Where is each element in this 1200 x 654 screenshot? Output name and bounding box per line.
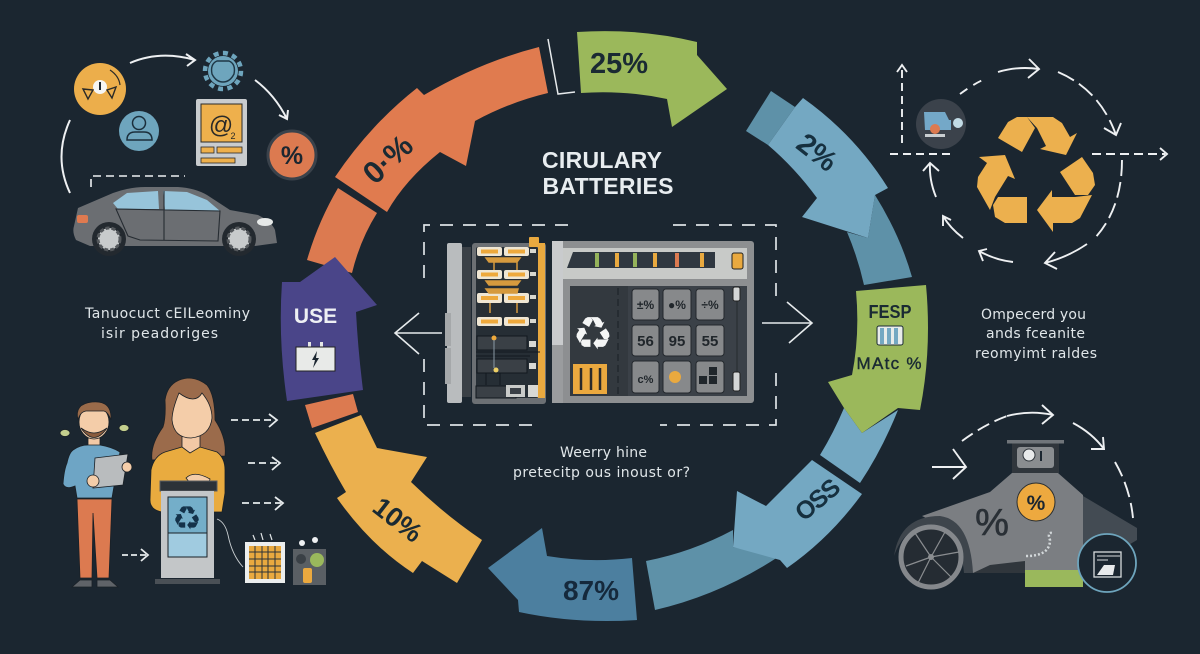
battery pack illustration [445,237,754,404]
segment: dark blue arc lower right [646,530,778,610]
icon: person circle [119,111,159,151]
button glyphs: ±% [637,298,654,312]
button glyphs: ●% [668,298,686,312]
woman [150,378,225,512]
caption: right: reomyimt raldes [975,346,1097,362]
segment: blue arc under FESP [820,408,898,483]
status display bar [567,252,743,269]
icon: percent circle [268,131,316,179]
button glyphs: ÷% [701,298,719,312]
segment: light blue OSS arrow [733,460,862,568]
segment: green 25% arrow [577,31,727,127]
button grid [632,289,724,393]
segment: dark blue arc upper [746,91,795,145]
title: CIRULARY [542,147,662,173]
bottom-left people and kiosk [60,378,326,587]
fender and wheel [894,516,973,587]
segment: lower orange arc [307,188,377,273]
control box [293,537,326,585]
circular flow ring [281,31,928,621]
grid device [245,533,285,583]
title: BATTERIES [542,173,674,199]
button glyphs: 95 [669,333,685,350]
icon: small puzzle badge [916,99,966,149]
segment: purple USE arrow [281,257,377,401]
segment: light blue 2% arrow [768,98,888,238]
slider [733,287,740,391]
icon: percent circle: % [281,142,303,170]
car [73,187,277,256]
man with tablet [60,402,132,587]
caption: right: Ompecerd you [981,307,1086,323]
percent badge [1017,483,1055,521]
top module [1007,440,1064,473]
segment: purple USE arrow: USE [294,305,337,328]
battery cells [477,247,536,326]
dashed arc arrows [932,405,1133,518]
circuitry [476,336,540,398]
icon: gear [205,53,241,89]
arrow: right [762,302,812,343]
icon: recycle symbol dark [175,506,199,529]
top-right recycling cycle [890,59,1167,269]
caption: left: isir peadoriges [101,326,218,342]
button glyphs: 56 [637,333,654,350]
bracket line [548,39,575,94]
bottom-right recycling vehicle [894,405,1137,592]
top-left car usage cluster [62,53,316,256]
large percent: % [975,502,1009,544]
caption: right: ands fceanite [986,326,1085,342]
segment: green FESP arrow: FESP [868,302,912,322]
chain dots [1026,533,1052,556]
icon: document card: @ [209,112,233,139]
icon: recycle symbol white [576,317,610,349]
segment: blue 87% arrow: 87% [563,575,619,606]
segment: yellow 10% arrow: 10% [367,491,428,548]
caption: center question [513,445,690,481]
button glyphs: c% [638,374,654,386]
arrows around cluster [62,54,288,193]
caption: left [84,306,250,342]
left module [445,237,546,404]
document circle [1078,534,1136,592]
caption: left: Tanuocuct cEILeominy [84,306,250,322]
segment: orange 0% arrow: 0·% [356,128,420,191]
icon: big recycle symbol [977,117,1095,232]
segment: yellow 10% arrow [315,415,482,583]
connecting wire [217,519,243,567]
segment: small orange block [305,394,358,428]
button glyphs [637,298,719,386]
segment: light blue OSS arrow: OSS [790,473,846,527]
icon: yellow gauge circle [74,63,126,115]
cycle arrows [890,59,1167,269]
vehicle body [922,473,1083,573]
segment: green 25% arrow: 25% [590,48,648,80]
recycling kiosk [155,481,220,584]
segment: green FESP arrow [828,285,928,433]
segment: dark blue arc right [847,195,912,285]
segment: blue 87% arrow [488,528,637,621]
green tray [1025,570,1083,587]
segment: light blue 2% arrow: 2% [790,127,843,179]
vehicle rear [1083,496,1137,572]
button glyphs: 55 [702,333,718,350]
dashed arrows [122,414,283,561]
right control panel [552,241,754,403]
underbody [973,561,1025,573]
segment: green FESP arrow: MAtc % [856,354,922,373]
yellow fuse block [573,364,607,394]
caption: center question: pretecitp ous inoust or? [513,465,690,481]
percent badge: % [1027,492,1046,515]
caption: center question: Weerry hine [560,445,647,461]
caption: right [975,307,1097,362]
segment: orange 0% arrow [335,47,548,212]
icon: document card [196,99,247,166]
icon: document card: 2 [230,131,236,141]
dashed frame around battery [424,225,776,425]
icon: small bars [877,326,903,345]
title [542,147,674,199]
arrow: left [395,313,442,354]
icon: battery [296,342,335,371]
